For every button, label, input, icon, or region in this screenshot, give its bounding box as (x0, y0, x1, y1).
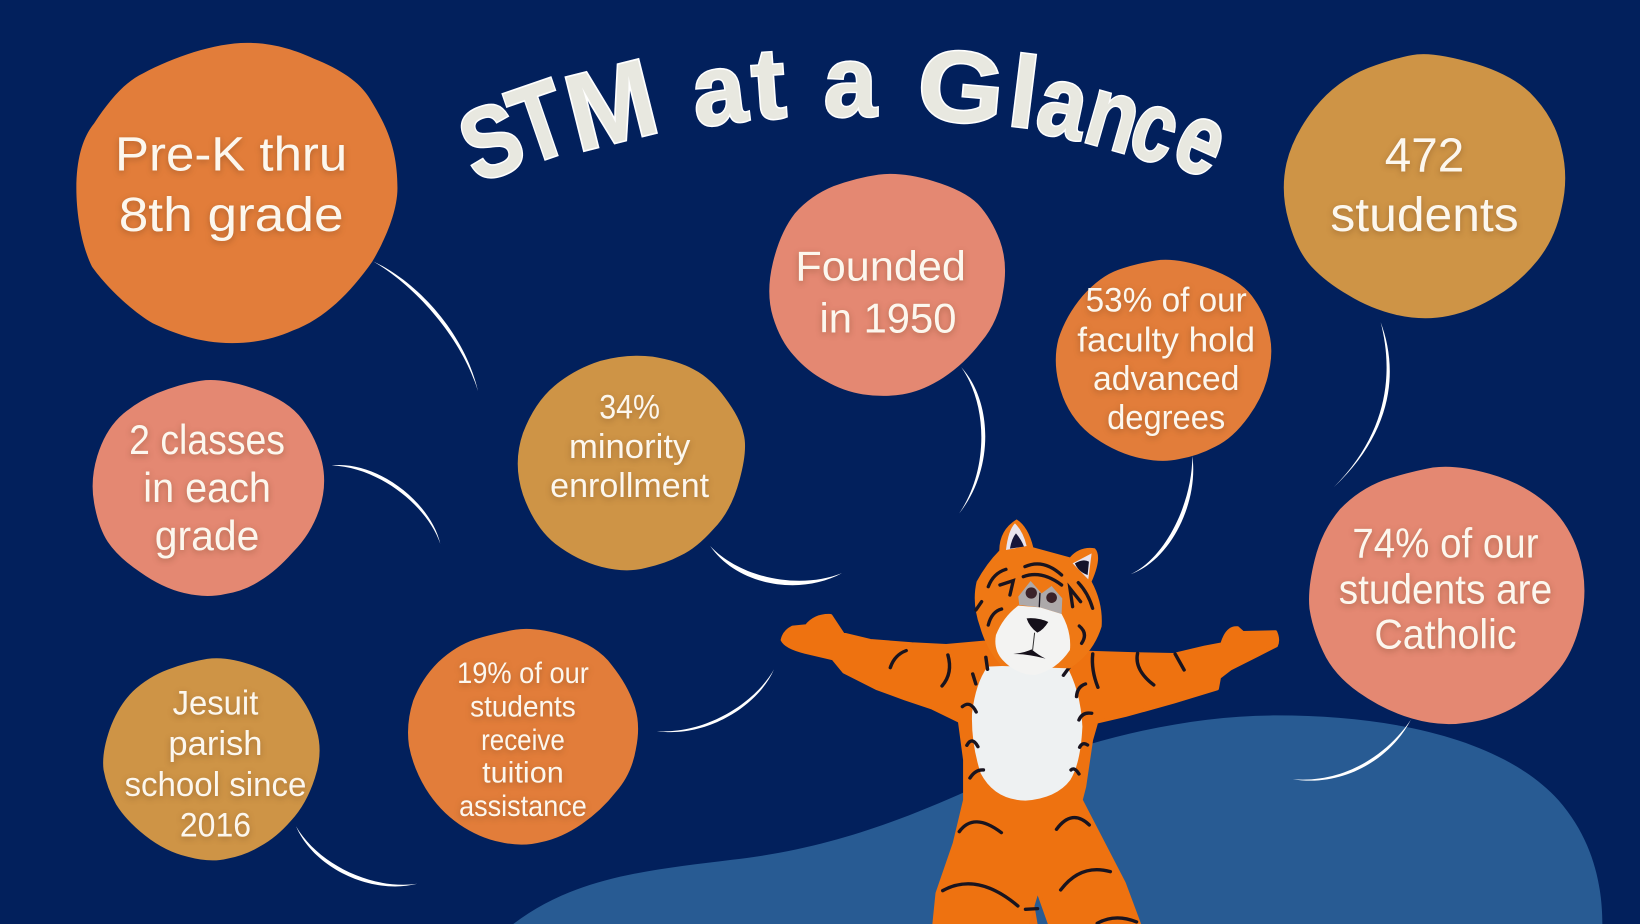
bubble: students: students (1330, 188, 1519, 242)
bubble: minority enrollment: minority (569, 428, 691, 466)
bubble: founded (769, 174, 1005, 396)
bubble: tuition assistance: students (470, 690, 576, 723)
decorative hill (512, 715, 1602, 924)
bubble: founded: in 1950 (819, 295, 956, 342)
bubble: faculty degrees (1056, 260, 1271, 461)
face stripes (976, 564, 1093, 643)
title: t (748, 27, 789, 141)
title: a (685, 29, 753, 148)
title: a (1029, 43, 1099, 162)
bubble: grades: Pre-K thru (115, 127, 347, 181)
title: c (1117, 67, 1195, 186)
title: S (445, 78, 537, 204)
eye patches (1018, 581, 1062, 614)
bubble: grades (76, 43, 397, 343)
bubble: minority enrollment: enrollment (550, 467, 710, 505)
bubble: students (1284, 54, 1565, 318)
mascot: tiger (782, 519, 1277, 924)
nose (1027, 618, 1048, 633)
bubble: Catholic students: 74% of our (1352, 519, 1539, 566)
bubble: Catholic students (1309, 467, 1584, 724)
title: a (824, 25, 878, 138)
ear inner left (1006, 523, 1027, 550)
bubble: minority enrollment: 34% (599, 388, 660, 426)
muzzle (995, 606, 1070, 675)
title: T (495, 56, 583, 187)
bubble: faculty degrees: faculty hold (1077, 321, 1255, 359)
bubble: tuition assistance: 19% of our (457, 657, 589, 690)
bubble: Jesuit school: 2016 (180, 807, 251, 845)
mouth (1013, 649, 1046, 659)
belly (972, 663, 1082, 801)
title: l (1003, 36, 1045, 150)
bubble: classes: grade (155, 512, 259, 559)
bubble: Catholic students: students are (1339, 566, 1552, 613)
bubble: classes: in each (143, 464, 271, 511)
bubble: faculty degrees: degrees (1107, 399, 1225, 437)
bubble: tuition assistance: receive (481, 724, 565, 757)
tail (1025, 883, 1038, 924)
bubble: Jesuit school: parish (168, 725, 263, 763)
bubble: classes (93, 380, 324, 596)
bubble: students: 472 (1385, 129, 1464, 183)
connector arrows (296, 261, 1411, 886)
bubble: faculty degrees: 53% of our (1086, 282, 1247, 320)
ear inner right (1073, 553, 1092, 579)
bubble: Jesuit school: Jesuit (173, 684, 259, 722)
bubble: Catholic students: Catholic (1374, 610, 1517, 657)
title: M (554, 35, 668, 174)
bubble: grades: 8th grade (119, 188, 344, 242)
bubble: faculty degrees: advanced (1093, 360, 1239, 398)
title: e (1159, 79, 1245, 200)
title (445, 25, 1245, 204)
bubble: tuition assistance: assistance (459, 790, 587, 823)
bubble: tuition assistance (408, 629, 638, 845)
bubble: tuition assistance: tuition (482, 756, 564, 789)
bubble: Jesuit school (103, 658, 320, 860)
title: n (1074, 54, 1153, 175)
body stripes (890, 651, 1184, 923)
eyes (1026, 587, 1037, 599)
bubble: classes: 2 classes (129, 416, 285, 463)
bubble: minority enrollment (518, 356, 745, 570)
bubble: Jesuit school: school since (124, 766, 306, 804)
head shape (975, 519, 1102, 668)
bubble: founded: Founded (795, 242, 966, 289)
body and arms (782, 616, 1277, 924)
tiger head (975, 519, 1102, 675)
title: G (913, 28, 1009, 147)
